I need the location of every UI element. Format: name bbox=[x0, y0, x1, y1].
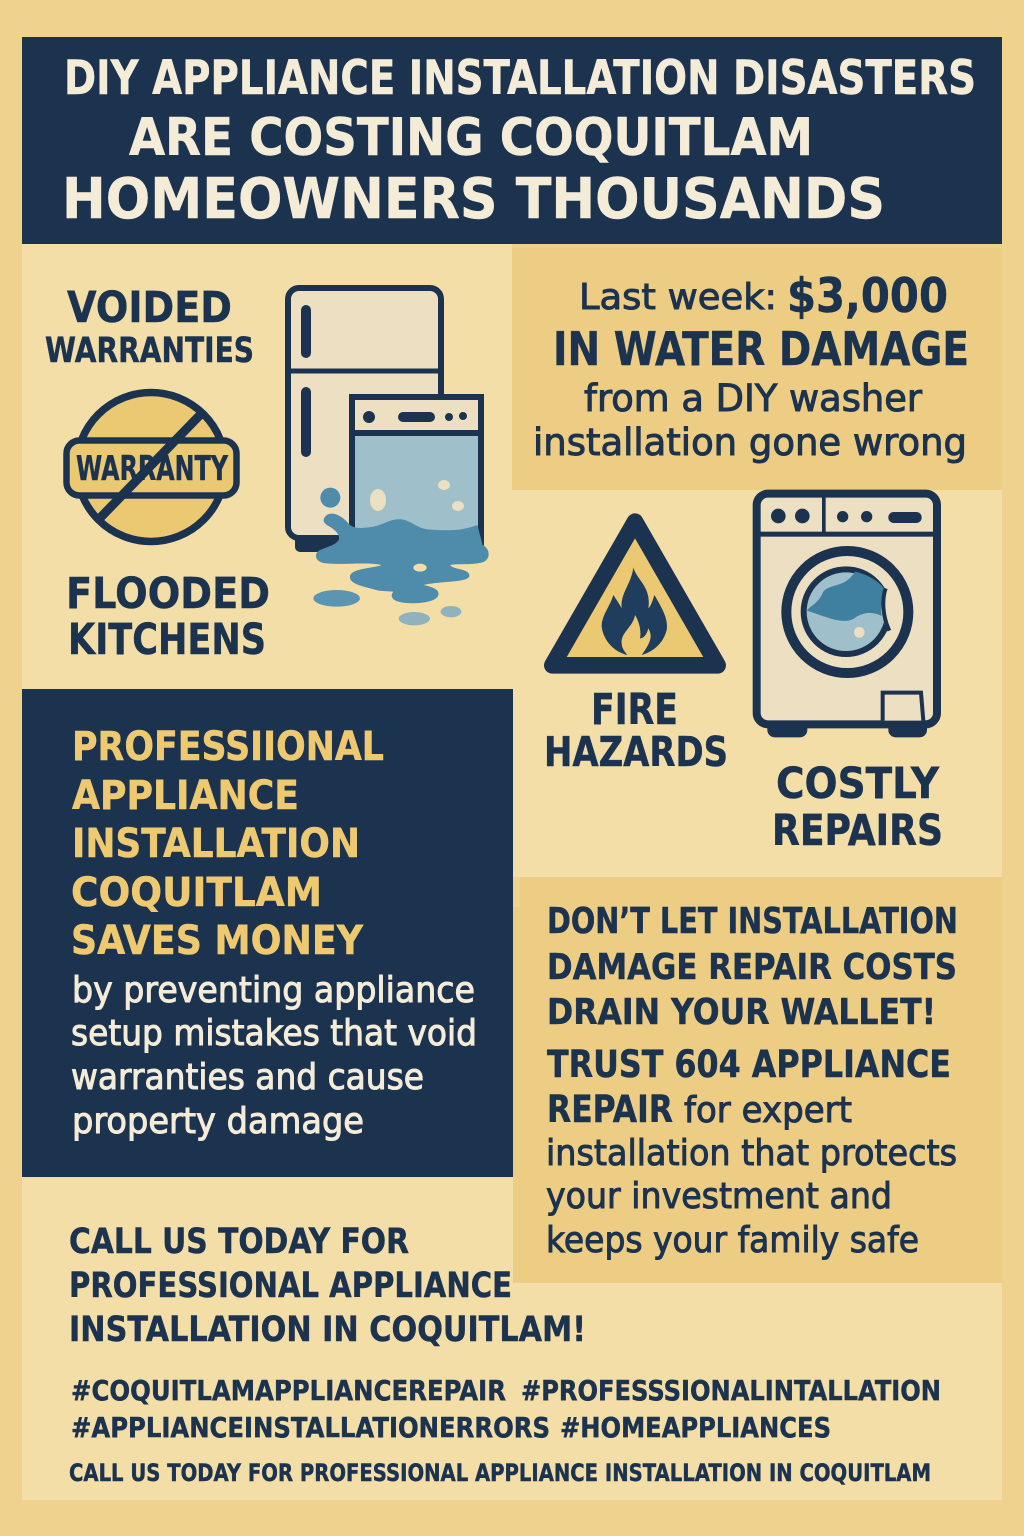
icon: fire warning triangle bbox=[552, 522, 718, 665]
heading: call us today: PROFESSIONAL APPLIANCE bbox=[69, 1266, 512, 1306]
heading: voided warranties: VOIDED bbox=[67, 283, 232, 333]
label: costly repairs: COSTLY bbox=[776, 759, 940, 809]
panel: water damage callout bbox=[512, 248, 1002, 490]
heading: flooded kitchens: FLOODED bbox=[66, 569, 270, 619]
heading: saves money: INSTALLATION bbox=[72, 821, 360, 867]
text: body copy: warranties and cause bbox=[71, 1057, 424, 1098]
text: trust message: installation that protects bbox=[546, 1133, 957, 1174]
heading: call us today: INSTALLATION IN COQUITLAM! bbox=[69, 1310, 586, 1350]
panel: water damage callout: from a DIY washer bbox=[584, 377, 923, 420]
label: costly repairs: REPAIRS bbox=[772, 806, 943, 856]
panel: water damage callout: installation gone wrong bbox=[533, 421, 967, 464]
heading: flooded kitchens: KITCHENS bbox=[68, 615, 266, 665]
hashtags bbox=[71, 1374, 941, 1444]
heading: call us today: CALL US TODAY FOR bbox=[69, 1222, 409, 1262]
text: body copy bbox=[71, 970, 477, 1142]
icon: refrigerator bbox=[288, 288, 441, 552]
hashtags: #COQUITLAMAPPLIANCEREPAIR bbox=[71, 1374, 506, 1407]
heading: voided warranties: WARRANTIES bbox=[45, 331, 254, 371]
hashtags: #HOMEAPPLIANCES bbox=[560, 1411, 831, 1444]
heading: don't let damage drain your wallet: DRAIN YOUR WALLET! bbox=[547, 992, 936, 1033]
heading: flooded kitchens bbox=[66, 569, 270, 665]
panel: voided warranties and flooded kitchens bbox=[22, 244, 512, 689]
label: fire hazards: FIRE bbox=[591, 685, 678, 735]
title banner: ARE COSTING COQUITLAM bbox=[129, 108, 813, 168]
heading: saves money: SAVES MONEY bbox=[71, 918, 364, 964]
text: trust message: for expert bbox=[684, 1090, 852, 1131]
panel: water damage callout: $3,000 bbox=[787, 269, 948, 324]
label: costly repairs bbox=[772, 759, 943, 856]
text: body copy: property damage bbox=[72, 1101, 364, 1142]
icon: water puddle bbox=[313, 488, 489, 625]
label: fire hazards bbox=[544, 685, 728, 776]
text: trust message: REPAIR bbox=[547, 1088, 673, 1131]
panel: call to action and hashtags bbox=[22, 1177, 1002, 1500]
panel: fire hazards and costly repairs bbox=[512, 490, 1002, 877]
icon: void warranty badge: WARRANTY bbox=[76, 449, 228, 489]
heading: saves money: COQUITLAM bbox=[71, 870, 322, 916]
hashtags: #PROFESSSIONALINTALLATION bbox=[521, 1374, 941, 1407]
icon: washing machine bbox=[757, 494, 937, 737]
heading: don't let damage drain your wallet bbox=[547, 901, 958, 1033]
heading: saves money: PROFESSIIONAL bbox=[72, 724, 384, 770]
text: trust message: your investment and bbox=[546, 1176, 892, 1217]
panel: professional installation saves money bbox=[22, 689, 513, 1177]
label: fire hazards: HAZARDS bbox=[544, 728, 728, 776]
text: trust message bbox=[546, 1043, 957, 1261]
text: body copy: setup mistakes that void bbox=[71, 1013, 477, 1054]
icon: void warranty badge bbox=[66, 392, 236, 542]
text: trust message: TRUST 604 APPLIANCE bbox=[547, 1043, 951, 1086]
text: body copy: by preventing appliance bbox=[72, 970, 475, 1011]
title banner bbox=[22, 37, 1002, 244]
panel: water damage callout: Last week: bbox=[579, 277, 777, 318]
heading: voided warranties bbox=[45, 283, 254, 371]
heading: saves money: APPLIANCE bbox=[72, 773, 299, 819]
title banner: HOMEOWNERS THOUSANDS bbox=[62, 167, 885, 232]
heading: don't let damage drain your wallet: DAMAGE REPAIR COSTS bbox=[547, 947, 957, 988]
hashtags: #APPLIANCEINSTALLATIONERRORS bbox=[71, 1411, 550, 1444]
text: trust message: keeps your family safe bbox=[546, 1220, 919, 1261]
panel: trust 604 appliance repair bbox=[513, 877, 1002, 1283]
heading: saves money bbox=[71, 724, 384, 964]
icon: leaking dishwasher bbox=[352, 397, 481, 547]
heading: call us today bbox=[69, 1222, 586, 1350]
